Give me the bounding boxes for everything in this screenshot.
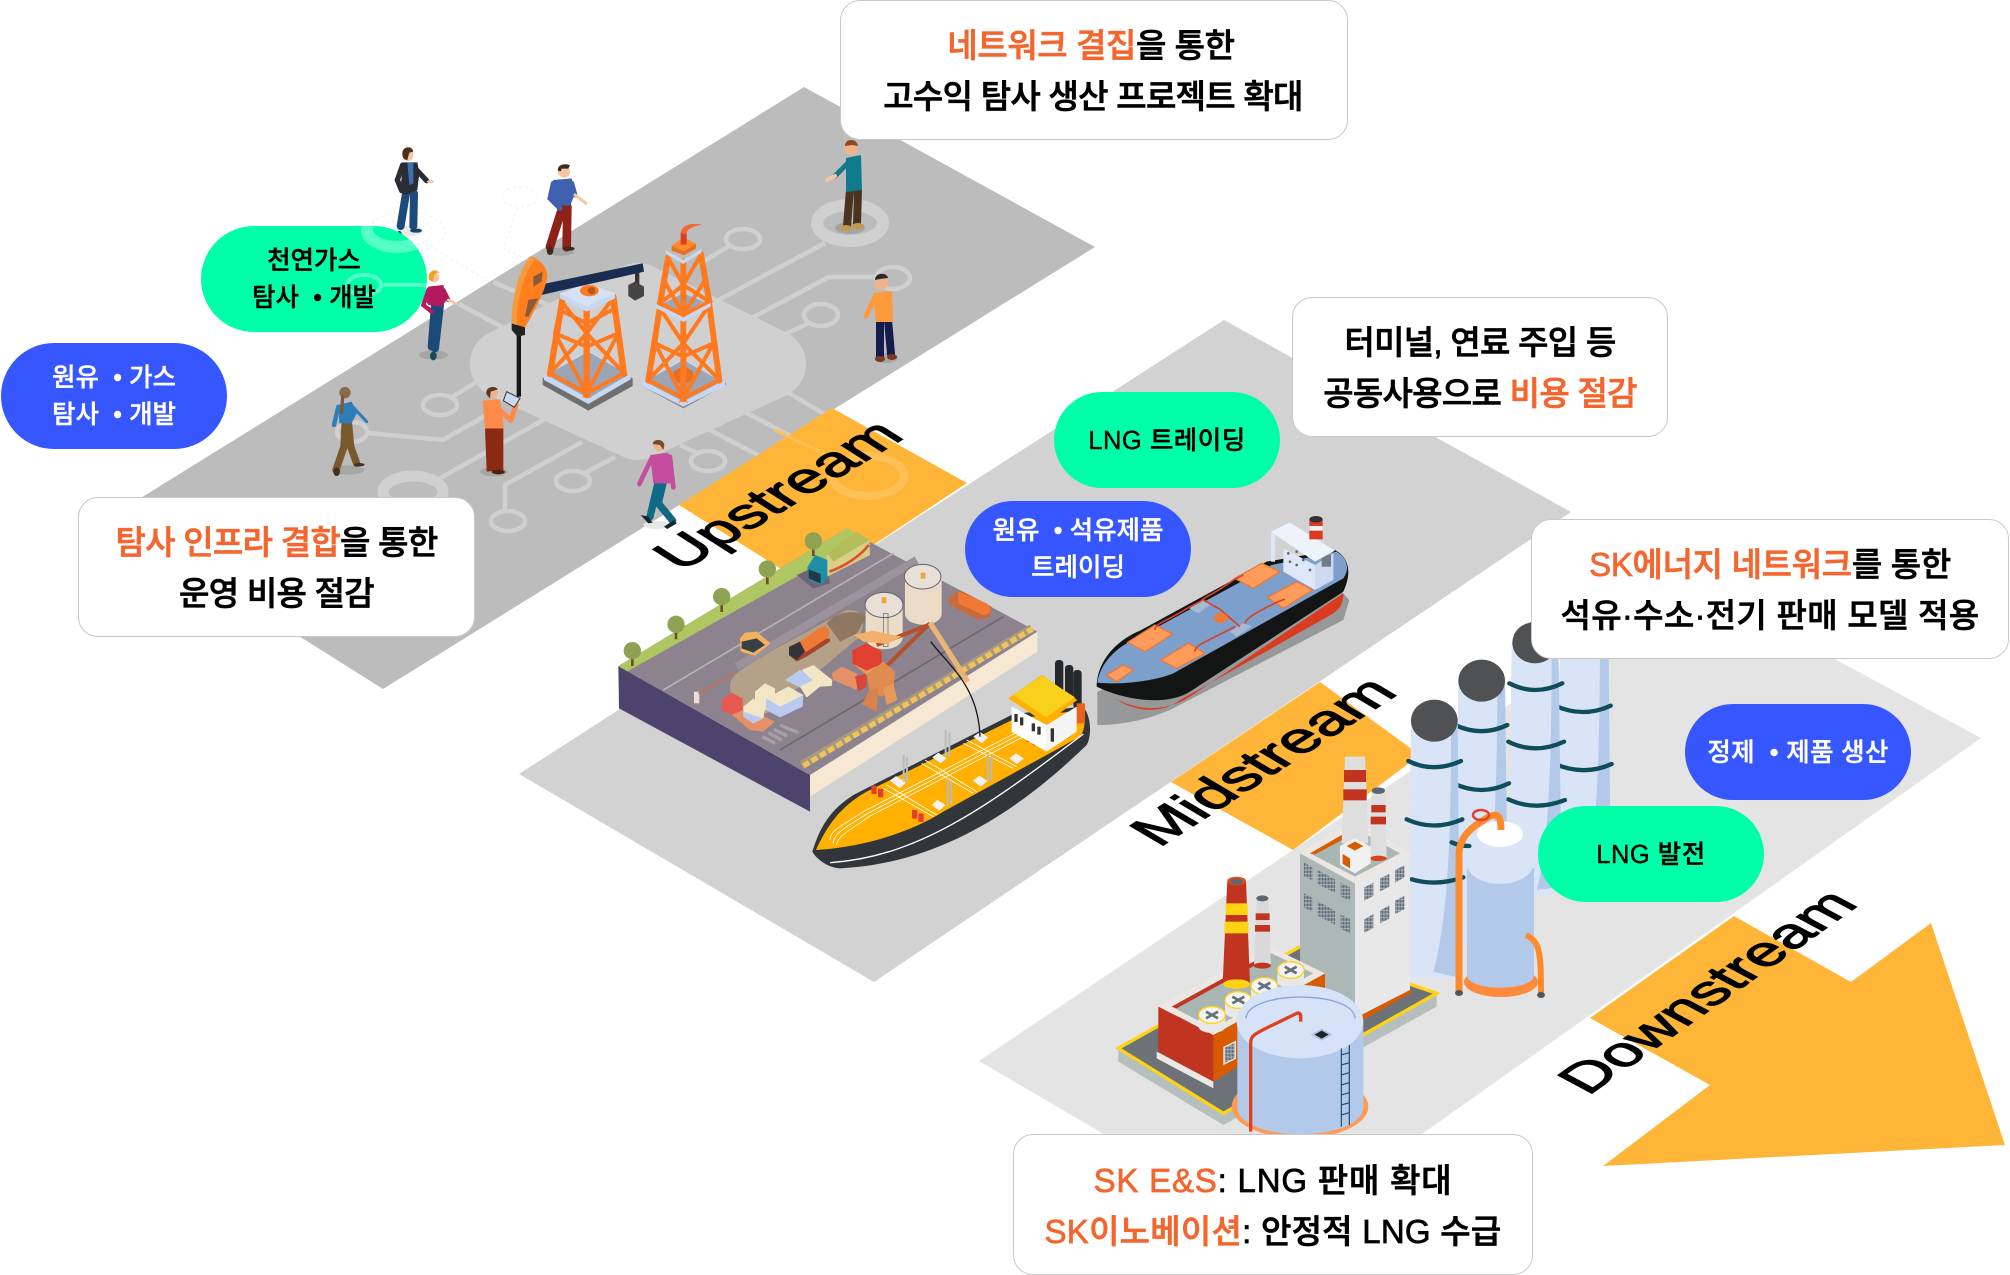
vehicle: green truck: [797, 532, 870, 588]
arrow: downstream big orange arrow: [1590, 916, 2005, 1166]
tower A: [1407, 700, 1469, 978]
yard ground: [730, 610, 863, 713]
pill: LNG power generation: [1538, 806, 1764, 902]
deck equipment: [890, 730, 1024, 811]
trees: [624, 532, 822, 666]
person: woman in black jacket: [397, 147, 434, 239]
callout: network concentration: [840, 0, 1348, 140]
illustration: power plant: [1118, 757, 1437, 1138]
large storage tank: [1232, 985, 1368, 1138]
person: man in pink sweater walking: [639, 440, 677, 529]
callout: SK Energy network: 석유·수소·전기 판매 모델 적용: [1561, 597, 1979, 634]
deck lines: [830, 731, 1083, 863]
storage tanks: [865, 564, 942, 649]
ship shadow: [1097, 590, 1349, 725]
crane: [852, 623, 968, 712]
lower red unit: [1157, 947, 1325, 1088]
panel: upstream orange band: [679, 408, 967, 587]
vehicle: orange tanker upper right: [948, 590, 992, 620]
pill: crude oil and gas exploration: 원유 • 가스: [52, 364, 176, 392]
superstructure: [1008, 675, 1077, 752]
vehicle: small yellow car: [740, 632, 771, 656]
red valves: [871, 733, 1038, 822]
ship hull: [812, 707, 1090, 868]
callout: terminal cost saving: [1292, 297, 1668, 437]
red pipes: [1155, 575, 1285, 652]
person: man in teal sweater: [827, 140, 865, 234]
icon: pump jack: [512, 256, 644, 397]
red and yellow stack: [1223, 877, 1250, 989]
person: woman walking in blue shirt: [332, 387, 367, 476]
black hull: [1097, 550, 1348, 700]
person: man in orange shirt: [866, 274, 898, 363]
illustration: port terminal: [618, 528, 1037, 812]
vehicle: flatbed truck: [722, 693, 775, 732]
pill: natural gas exploration: [201, 226, 427, 332]
panel: midstream orange band: [1171, 682, 1420, 850]
callout: terminal cost saving: 공동사용으로 비용 절감: [1323, 375, 1637, 412]
callout: network concentration: 고수익 탐사 생산 프로젝트 확대: [883, 78, 1303, 115]
ventilation fans: [1199, 962, 1304, 1033]
small white stack: [1254, 895, 1271, 969]
round valve: [1214, 613, 1228, 623]
icon: drilling tower left: [543, 283, 633, 411]
callout: SK E&S and SK Innovation: [1013, 1134, 1533, 1275]
callout: exploration infrastructure: 탐사 인프라 결합을 통한: [115, 524, 438, 561]
funnel: [1309, 516, 1323, 539]
bridge: [1271, 523, 1335, 590]
pill: LNG trading: [1054, 392, 1280, 488]
pill: LNG power generation: LNG 발전: [1596, 840, 1706, 868]
pill: crude oil and petroleum trading: [965, 501, 1191, 597]
label: Midstream: Midstream: [1115, 668, 1410, 854]
callout: terminal cost saving: 터미널, 연료 주입 등: [1344, 324, 1616, 361]
hose: [931, 642, 980, 737]
icon: small vessel with orange pipes: [1455, 810, 1545, 998]
illustration: blue tanker ship: [1097, 516, 1349, 725]
icon: drilling tower right: [642, 224, 726, 408]
vehicle: truck near crane: [832, 667, 867, 692]
orange deck pads: [1107, 563, 1313, 682]
central chip shape: [505, 298, 771, 425]
callout: exploration infrastructure: [78, 497, 475, 637]
crosswalk: [762, 725, 798, 743]
illustration: upstream oil field: [332, 147, 726, 529]
tower D: [1553, 623, 1612, 867]
ship deck: [816, 710, 1084, 850]
platform base: [1118, 947, 1437, 1125]
vehicle: orange tanker centre: [789, 626, 830, 662]
label: Upstream: Upstream: [639, 411, 916, 578]
containers: [755, 665, 832, 717]
red lower hull: [1115, 593, 1343, 710]
roof box: [1340, 838, 1371, 873]
person: woman in magenta top: [419, 270, 457, 360]
barrier gate: [694, 673, 734, 703]
pill: refining and production: [1685, 704, 1911, 800]
person: man with tablet: [480, 387, 520, 476]
short chimney: [1370, 787, 1387, 861]
tall chimney: [1342, 757, 1368, 843]
windows: [1304, 863, 1404, 933]
callout: SK E&S and SK Innovation: SK이노베이션: 안정적 LNG 수급: [1045, 1212, 1501, 1250]
panel: upstream plate: [110, 87, 1095, 689]
person: man in blue sweater: [547, 164, 586, 256]
pill: natural gas exploration: 천연가스: [267, 247, 361, 275]
pill: crude oil and petroleum trading: 트레이딩: [1031, 554, 1125, 582]
illustration: refinery towers: [1407, 622, 1612, 978]
blue deck: [1097, 552, 1347, 683]
callout: SK E&S and SK Innovation: SK E&S: LNG 판매 확대: [1094, 1162, 1452, 1198]
pill: natural gas exploration: 탐사 • 개발: [252, 284, 376, 312]
pill: LNG trading: LNG 트레이딩: [1088, 426, 1246, 454]
label: Downstream: Downstream: [1543, 881, 1870, 1102]
decoration ring on upstream band: [775, 430, 904, 496]
pill: refining and production: 정제 • 제품 생산: [1707, 738, 1889, 766]
terminal block faces: [618, 528, 1037, 812]
main building: [1300, 757, 1413, 1020]
callout: exploration infrastructure: 운영 비용 절감: [179, 575, 374, 612]
road markings: [663, 553, 1033, 766]
callout: SK Energy network: SK에너지 네트워크를 통한: [1589, 546, 1951, 583]
grey deck blocks: [1189, 600, 1252, 637]
tower B: [1453, 660, 1509, 947]
funnels: [1055, 660, 1082, 708]
pill: crude oil and petroleum trading: 원유 • 석유제품: [993, 517, 1163, 545]
illustration: yellow tanker ship: [812, 642, 1090, 868]
tower C: [1508, 622, 1565, 895]
panel: midstream plate: [519, 320, 1571, 982]
pill: crude oil and gas exploration: 탐사 • 개발: [52, 401, 176, 429]
panel: downstream plate: [979, 582, 1981, 1236]
pill: crude oil and gas exploration: [1, 343, 227, 449]
callout: SK Energy network: [1531, 519, 2009, 659]
callout: network concentration: 네트워크 결집을 통한: [947, 27, 1235, 64]
